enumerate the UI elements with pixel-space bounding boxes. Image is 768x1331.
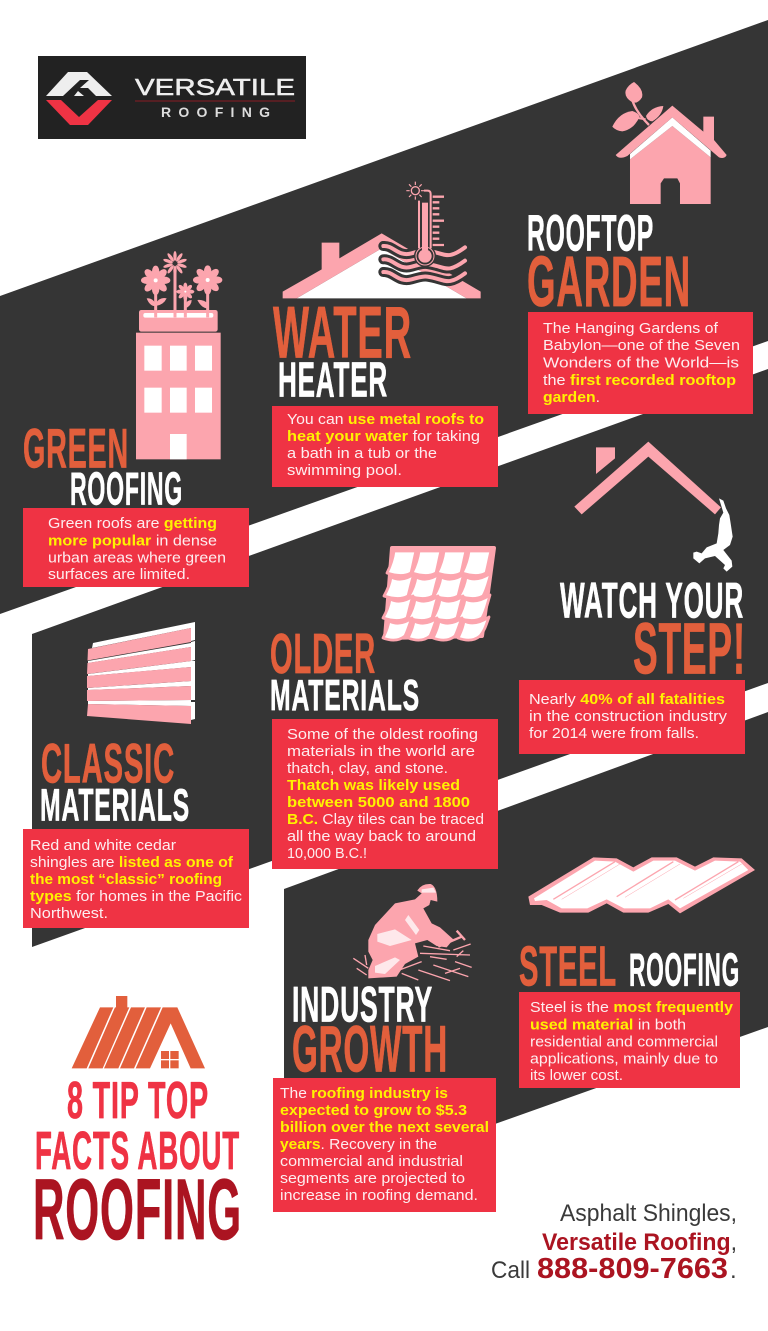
text block: steel roofing: applications, mainly due to <box>530 1052 718 1068</box>
text block: older materials: all the way back to around <box>287 829 476 845</box>
text block: industry growth: expected to grow to $5.3 <box>280 1103 467 1119</box>
text block: industry growth: segments are projected to <box>280 1171 465 1187</box>
text block: green roofing: Green roofs are getting <box>48 516 217 532</box>
text block: classic materials: Northwest. <box>30 906 108 922</box>
text block: classic materials: shingles are listed as one of <box>30 855 233 871</box>
text block: water heater: swimming pool. <box>287 463 402 479</box>
icon: roofer at work <box>353 884 472 981</box>
text block: steel roofing: its lower cost. <box>530 1068 623 1084</box>
text block: older materials: 10,000 B.C.! <box>287 846 367 862</box>
heading: industry growth <box>292 976 448 1086</box>
heading: title: 8 TIP TOP <box>67 1072 209 1130</box>
icon: roof with hanging man <box>574 442 733 572</box>
heading: water heater: HEATER <box>278 354 388 408</box>
panel: steel roofing <box>519 857 755 1088</box>
text block: industry growth: increase in roofing demand. <box>280 1188 478 1204</box>
heading: water heater <box>273 292 412 408</box>
text block: green roofing: surfaces are limited. <box>48 567 190 583</box>
icon: house with leaves <box>612 82 727 204</box>
call to action: . <box>730 1257 737 1284</box>
text block: older materials: between 5000 and 1800 <box>287 795 470 811</box>
text block: rooftop garden: the first recorded rooftop <box>543 373 736 389</box>
heading: older materials: MATERIALS <box>270 671 420 720</box>
icon: cedar shingle planks <box>87 622 195 724</box>
text block: watch your step <box>519 680 745 754</box>
text block: classic materials: the most “classic” roofing <box>30 872 222 888</box>
logo: Versatile Roofing <box>38 56 306 139</box>
text block: industry growth: commercial and industrial <box>280 1154 463 1170</box>
logo: Versatile Roofing: VERSATILE <box>135 74 295 100</box>
panel: industry growth <box>273 884 496 1212</box>
text block: green roofing: more popular in dense <box>48 534 217 550</box>
text block: watch your step: for 2014 were from falls. <box>529 726 699 742</box>
heading: green roofing: GREEN <box>23 416 129 480</box>
call to action: 888-809-7663 <box>537 1253 728 1285</box>
heading: title: FACTS ABOUT <box>35 1121 240 1181</box>
text block: water heater: heat your water for taking <box>287 429 480 445</box>
heading: green roofing: ROOFING <box>70 462 183 514</box>
text block: water heater: You can use metal roofs to <box>287 412 484 428</box>
text block: rooftop garden <box>528 312 753 414</box>
call to action: Versatile Roofing, <box>542 1229 737 1256</box>
icon: orange roof <box>72 996 205 1068</box>
text block: watch your step: Nearly 40% of all fatalities <box>529 692 725 708</box>
text block: industry growth <box>273 1078 496 1212</box>
heading: title <box>33 1072 242 1258</box>
text block: steel roofing: Steel is the most frequently <box>530 1000 734 1016</box>
text block: industry growth: billion over the next several <box>280 1120 489 1136</box>
icon: corrugated steel sheet <box>528 857 755 913</box>
heading: industry growth: GROWTH <box>292 1012 448 1086</box>
heading: classic materials: MATERIALS <box>40 780 190 830</box>
text block: water heater: a bath in a tub or the <box>287 446 437 462</box>
panel: classic materials <box>23 622 249 928</box>
heading: classic materials: CLASSIC <box>41 732 175 794</box>
text block: older materials: B.C. Clay tiles can be traced <box>287 812 484 828</box>
icon: building with rooftop flowers <box>136 251 222 459</box>
text block: green roofing <box>23 508 249 587</box>
text block: watch your step: in the construction industry <box>529 709 728 725</box>
text block: older materials: materials in the world are <box>287 744 475 760</box>
call to action: Call <box>491 1257 530 1284</box>
heading: green roofing <box>23 416 183 514</box>
text block: water heater <box>272 406 498 487</box>
panel: rooftop garden <box>527 82 753 414</box>
heading: watch your step <box>560 572 746 690</box>
text block: rooftop garden: Wonders of the World—is <box>543 356 739 372</box>
panel: water heater <box>272 182 498 487</box>
text block: rooftop garden: Babylon—one of the Seven <box>543 338 740 354</box>
heading: older materials <box>270 622 420 720</box>
text block: classic materials: types for homes in the Pacific <box>30 889 242 905</box>
panel: green roofing <box>23 251 249 587</box>
heading: title: ROOFING <box>33 1162 242 1258</box>
text block: industry growth: years. Recovery in the <box>280 1137 437 1153</box>
heading: classic materials <box>40 732 190 830</box>
title block: 8 tip top facts about roofing <box>33 996 242 1258</box>
heading: rooftop garden <box>527 204 691 322</box>
text block: rooftop garden: The Hanging Gardens of <box>543 321 719 337</box>
heading: older materials: OLDER <box>270 622 376 686</box>
text block: industry growth: The roofing industry is <box>280 1086 448 1102</box>
panel: watch your step <box>519 442 746 754</box>
text block: rooftop garden: garden . <box>543 390 600 406</box>
text block: older materials: Some of the oldest roofing <box>287 727 478 743</box>
text block: steel roofing: used material in both <box>530 1018 686 1034</box>
heading: steel roofing: STEEL <box>519 934 617 998</box>
text block: older materials: thatch, clay, and stone. <box>287 761 448 777</box>
icon: clay roof tiles <box>383 548 494 640</box>
text block: green roofing: urban areas where green <box>48 550 226 566</box>
text block: classic materials: Red and white cedar <box>30 838 176 854</box>
call to action: Asphalt Shingles, <box>560 1200 737 1227</box>
heading: water heater: WATER <box>273 292 412 374</box>
text block: steel roofing <box>519 992 740 1088</box>
panel: older materials <box>270 548 498 869</box>
text block: steel roofing: residential and commercial <box>530 1034 718 1050</box>
icon: roof with thermometer and waves <box>283 182 481 298</box>
text block: classic materials <box>23 829 249 928</box>
call to action <box>491 1200 737 1285</box>
text block: older materials: Thatch was likely used <box>287 778 460 794</box>
heading: industry growth: INDUSTRY <box>292 976 433 1032</box>
logo: Versatile Roofing: ROOFING <box>161 104 270 120</box>
text block: older materials <box>272 719 498 869</box>
